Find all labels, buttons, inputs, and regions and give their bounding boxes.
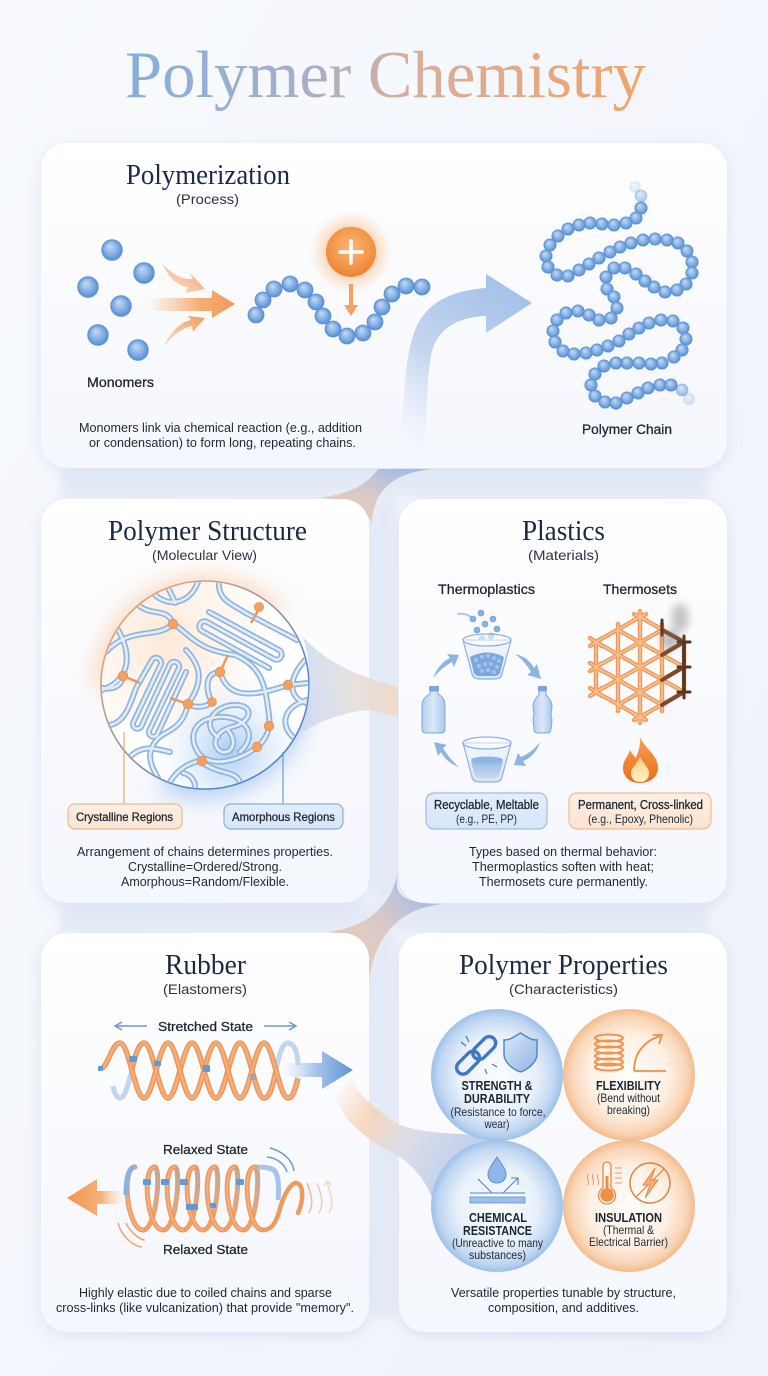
heading: polymer structure: Polymer Structure	[108, 516, 307, 547]
label: crystalline regions	[68, 804, 182, 829]
arrow: cycle top left	[433, 654, 459, 678]
monomer beads	[78, 240, 154, 360]
heading: polymerization	[126, 160, 290, 207]
heading: plastics	[522, 516, 605, 563]
icon: bend curve	[634, 1035, 666, 1071]
heading: thermosets: Thermosets	[603, 581, 677, 597]
heading: plastics: (Materials)	[528, 547, 599, 563]
callout: permanent: Permanent, Cross-linked	[578, 798, 703, 812]
icon: no electricity	[630, 1163, 670, 1203]
property: insulation	[563, 1140, 695, 1272]
long polymer chain	[540, 182, 698, 409]
property: insulation: (Thermal &	[603, 1223, 654, 1237]
description: polymerization	[79, 421, 362, 450]
property: chemical resistance: (Unreactive to many	[452, 1236, 543, 1250]
property: chemical resistance	[431, 1140, 563, 1272]
relaxed coil	[126, 1167, 302, 1230]
icon: droplet on surface	[470, 1157, 525, 1203]
property: strength and durability: wear)	[484, 1117, 510, 1131]
arrow: addition down	[344, 284, 358, 316]
label: relaxed state upper: Relaxed State	[163, 1142, 248, 1157]
property: flexibility: FLEXIBILITY	[596, 1079, 662, 1093]
property: strength and durability	[431, 1009, 563, 1141]
heading: rubber: (Elastomers)	[163, 981, 247, 997]
property: insulation: Electrical Barrier)	[589, 1235, 668, 1249]
magnifier glow	[95, 575, 310, 798]
icon: rigid bottle	[422, 686, 445, 733]
description: plastics: Types based on thermal behavior:	[469, 845, 657, 859]
callout: permanent: (e.g., Epoxy, Phenolic)	[588, 812, 693, 826]
molecular view magnifier	[100, 580, 310, 790]
property: chemical resistance: CHEMICAL	[469, 1211, 527, 1225]
label: amorphous regions: Amorphous Regions	[232, 810, 335, 824]
label: amorphous regions	[224, 804, 343, 829]
property: chemical resistance: RESISTANCE	[463, 1224, 532, 1238]
heading: thermoplastics: Thermoplastics	[438, 581, 535, 597]
heading: rubber	[163, 950, 247, 997]
icon: flame	[623, 737, 658, 783]
icon: soft bottle	[533, 686, 552, 733]
property: strength and durability: DURABILITY	[464, 1092, 531, 1106]
connector: lower flow junction	[328, 872, 442, 982]
description: polymer structure: Crystalline=Ordered/Strong.	[128, 860, 282, 874]
icon: cup with melt	[463, 737, 511, 782]
arrow: to polymer chain	[399, 274, 532, 447]
heading: polymer structure	[108, 516, 307, 563]
heading: rubber: Rubber	[165, 950, 247, 981]
property: insulation: INSULATION	[595, 1211, 662, 1225]
recycling cycle	[422, 610, 552, 782]
callout: permanent	[569, 793, 711, 829]
connector: rubber to properties	[335, 1078, 490, 1198]
property: flexibility	[563, 1009, 695, 1141]
arrows: monomers converge	[148, 263, 235, 348]
heading: plastics: Plastics	[522, 516, 605, 547]
heading: polymer properties: Polymer Properties	[459, 950, 668, 981]
description: polymer structure: Arrangement of chains determines properties.	[77, 845, 333, 859]
title: Polymer Chemistry	[125, 38, 646, 112]
description: rubber: cross-links (like vulcanization) that provide "memory".	[56, 1301, 354, 1315]
property: flexibility: (Bend without	[597, 1091, 661, 1105]
description: plastics: Thermoplastics soften with heat;	[472, 860, 654, 874]
stretched helix	[58, 1043, 298, 1098]
label: stretched state	[115, 1019, 296, 1034]
property: chemical resistance: substances)	[469, 1248, 526, 1262]
description: polymer structure: Amorphous=Random/Flexible.	[121, 875, 289, 889]
description: polymerization: Monomers link via chemical reaction (e.g., addition	[79, 421, 362, 435]
gutter bands between panels	[60, 470, 708, 1318]
charred edge	[662, 630, 684, 705]
icon: addition catalyst	[309, 210, 393, 294]
icon: shield	[504, 1033, 537, 1072]
description: polymer structure	[77, 845, 333, 889]
arrow: stretch right	[283, 1051, 353, 1089]
callout: recyclable: (e.g., PE, PP)	[456, 812, 517, 826]
icon: spring	[595, 1034, 623, 1070]
label: monomers: Monomers	[87, 374, 154, 390]
cross-links	[98, 1056, 256, 1080]
label: polymer chain: Polymer Chain	[582, 421, 672, 437]
heading: polymer structure: (Molecular View)	[152, 547, 257, 563]
property: strength and durability: (Resistance to force,	[450, 1105, 546, 1119]
icon: chain link	[454, 1034, 498, 1077]
arrow: cycle bottom right	[514, 742, 540, 766]
icon: cup with pellets	[463, 634, 511, 679]
description: rubber	[56, 1286, 354, 1315]
motion arcs	[118, 1148, 332, 1247]
panel: polymer structure	[41, 499, 369, 903]
description: polymerization: or condensation) to form long, repeating chains.	[89, 436, 356, 450]
connector: structure to plastics	[300, 637, 398, 733]
panel: plastics	[399, 499, 727, 903]
arrow: cycle top right	[515, 654, 541, 679]
label: stretched state: Stretched State	[158, 1019, 253, 1034]
panel: polymer properties	[399, 933, 727, 1332]
description: polymer properties: Versatile properties tunable by structure,	[451, 1286, 676, 1300]
short polymer chain	[248, 276, 430, 344]
description: polymer properties: composition, and additives.	[488, 1301, 639, 1315]
callout: recyclable	[426, 793, 547, 829]
heading: polymer properties	[459, 950, 668, 997]
icon: falling pellets	[457, 610, 500, 650]
description: plastics	[469, 845, 657, 889]
description: polymer properties	[451, 1286, 676, 1315]
description: plastics: Thermosets cure permanently.	[479, 875, 648, 889]
heading: polymerization: Polymerization	[126, 160, 290, 191]
smoke	[671, 603, 689, 633]
thermoset lattice	[590, 603, 690, 723]
leader lines	[124, 732, 283, 804]
callout: recyclable: Recyclable, Meltable	[434, 798, 539, 812]
property: flexibility: breaking)	[607, 1103, 650, 1117]
property: strength and durability: STRENGTH &	[462, 1079, 532, 1093]
description: rubber: Highly elastic due to coiled chains and sparse	[79, 1286, 332, 1300]
panel: polymerization	[41, 143, 727, 468]
connector: upper flow junction	[318, 469, 433, 525]
arrow: cycle bottom left	[434, 742, 459, 767]
cross-link nodes	[118, 602, 293, 766]
arrow: relax left	[67, 1179, 123, 1216]
label: crystalline regions: Crystalline Regions	[76, 810, 173, 824]
heading: polymerization: (Process)	[176, 191, 239, 207]
label: relaxed state lower: Relaxed State	[163, 1242, 248, 1257]
panel: rubber	[41, 933, 369, 1332]
heading: polymer properties: (Characteristics)	[509, 981, 618, 997]
icon: thermometer	[587, 1162, 622, 1204]
